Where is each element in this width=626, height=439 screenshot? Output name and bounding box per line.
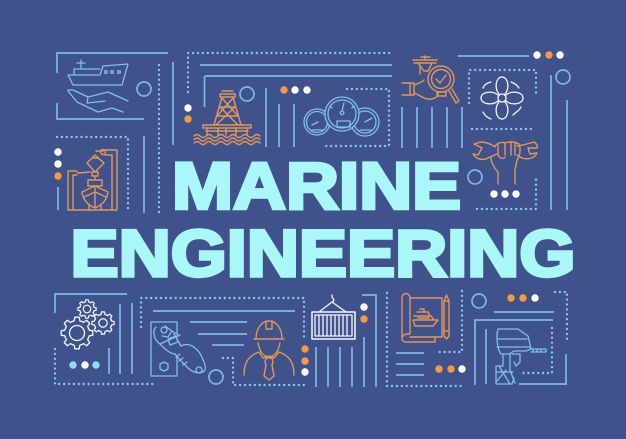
title: MARINE <box>172 148 461 222</box>
panel: right lines <box>469 70 570 210</box>
panel: bottom center lines <box>141 298 305 385</box>
icon: outboard motor <box>496 329 546 384</box>
panel: lines under container <box>316 295 376 387</box>
panel: gauges frame and lines <box>325 89 462 148</box>
dots: left middle <box>54 148 62 180</box>
icon: valve and magnifier <box>402 56 459 103</box>
panel: left middle lines <box>57 136 144 213</box>
icon: oil rig <box>194 91 260 144</box>
icon: hand with wrench <box>473 142 537 184</box>
dots: under wrench <box>490 190 520 198</box>
panel: blueprint frame <box>387 291 465 386</box>
title <box>70 148 576 290</box>
icon: gauges <box>304 97 379 136</box>
icon: ship propeller fan <box>481 77 523 119</box>
icon: ship in dock crane <box>68 150 117 210</box>
icon: blueprint with ship <box>402 294 449 342</box>
icon: shipping container <box>312 295 355 339</box>
panel: top center lines <box>188 53 392 147</box>
icon: engineer <box>244 321 294 380</box>
dots: under blueprint <box>435 365 466 373</box>
dots: left of rig <box>184 104 192 123</box>
icon: ship on hand <box>68 60 128 112</box>
dots and line: top right <box>458 51 564 59</box>
icon: wrench in hand <box>151 322 206 378</box>
panel: outboard motor frame <box>472 292 567 385</box>
panel: gears frame <box>55 294 157 384</box>
title: ENGINEERING <box>70 216 576 290</box>
dots: under gears <box>69 361 100 369</box>
dots: top center <box>280 86 311 94</box>
icon: gears <box>61 300 114 349</box>
dots: orange orange white right of engineer <box>301 345 309 376</box>
panel: ship frame and lines <box>57 53 173 213</box>
